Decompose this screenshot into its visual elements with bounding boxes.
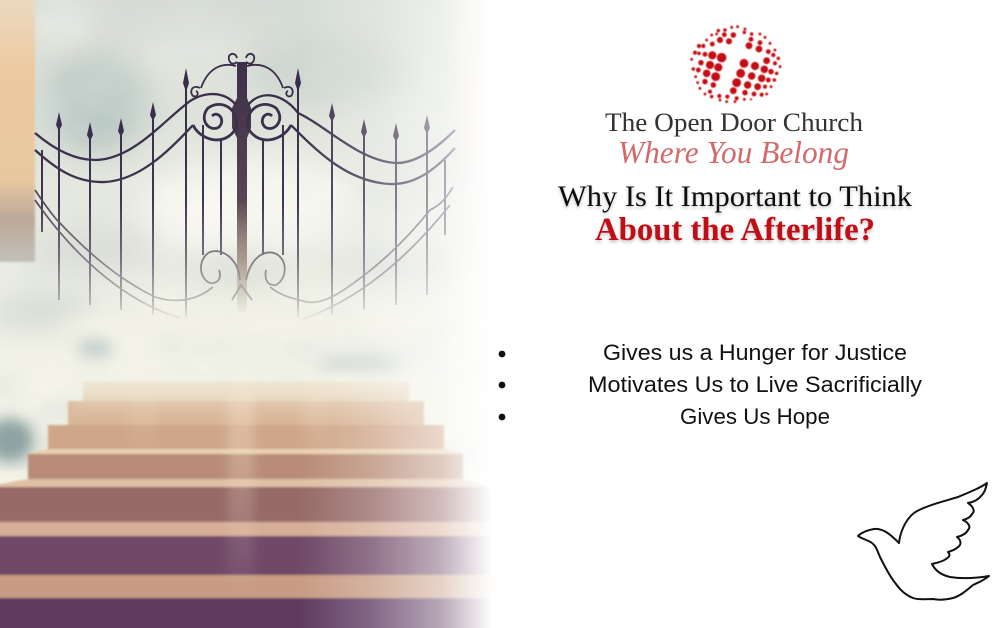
- centre post: [232, 62, 251, 312]
- bottom scrolls: [201, 251, 285, 300]
- left pillar: [0, 0, 35, 262]
- title: [558, 180, 912, 248]
- step 5: [0, 487, 520, 522]
- light rays: [226, 401, 256, 574]
- lower rails: [35, 187, 453, 320]
- title line 1: Why Is It Important to Think: [558, 180, 912, 213]
- crown scrollwork: [191, 54, 293, 96]
- bullet 2: Motivates Us to Live Sacrificially: [588, 372, 922, 397]
- logo: dotted red globe with cross: [691, 26, 781, 103]
- step 7 tread: [0, 575, 520, 598]
- step 6 riser: [0, 536, 520, 575]
- sky and clouds: [0, 0, 464, 484]
- pickets: [42, 76, 445, 318]
- logo: The Open Door Church: [605, 26, 863, 170]
- step 4 tread: [28, 449, 462, 454]
- spires: [56, 68, 430, 140]
- upper rails: [35, 94, 455, 184]
- step 7 riser: [0, 598, 520, 628]
- right side white fade: [313, 0, 498, 628]
- step 6 tread: [0, 522, 520, 536]
- step 3: [48, 425, 444, 449]
- logo: tagline: Where You Belong: [618, 134, 849, 170]
- step 5 tread: [0, 479, 490, 487]
- logo: church name: The Open Door Church: [605, 108, 863, 137]
- right pillar: [458, 0, 488, 170]
- mist band below gate: [152, 310, 333, 320]
- bullet 3: [499, 404, 830, 429]
- staircase: [0, 382, 520, 628]
- step 1: [83, 382, 409, 401]
- photo: heavenly gate and stairs: [0, 0, 520, 628]
- spiral scrolls: [193, 104, 291, 140]
- bullet 1: Gives us a Hunger for Justice: [603, 340, 907, 365]
- wrought iron gate: [35, 54, 455, 320]
- bullet list: [499, 340, 922, 429]
- step 4: [28, 449, 463, 479]
- mist over top steps: [70, 381, 417, 412]
- bullet 3: Gives Us Hope: [680, 404, 830, 429]
- title line 2: About the Afterlife?: [595, 212, 875, 248]
- step 2: [68, 401, 424, 425]
- icon: dove outline: [858, 483, 989, 600]
